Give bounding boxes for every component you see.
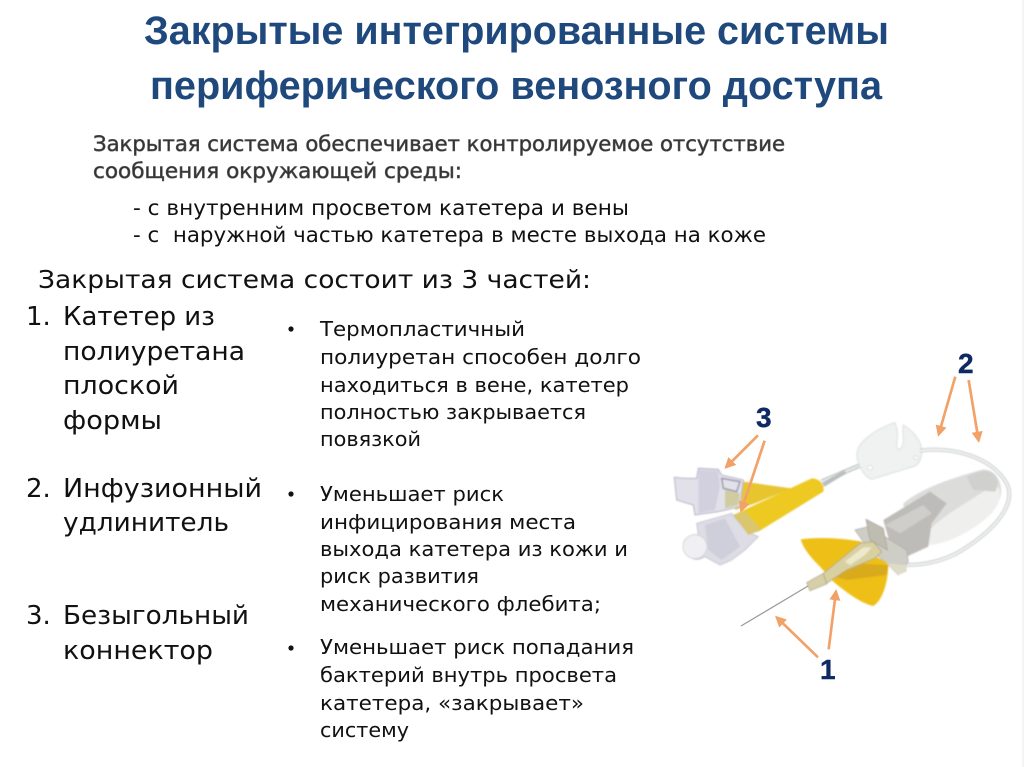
bullet 2: риск развития [320, 564, 479, 588]
dash list: - с наружной частью катетера в месте выхода на коже [133, 223, 766, 247]
bullet 1: повязкой [320, 427, 421, 451]
bullet 2 [288, 482, 628, 616]
label 2: 2 [958, 348, 974, 379]
bullet 3 [288, 635, 634, 742]
part 3: коннектор [63, 636, 213, 666]
title: Закрытые интегрированные системы [144, 9, 889, 53]
part 1: формы [63, 406, 162, 436]
intro paragraph: Закрытая система обеспечивает контролируемое отсутствие [93, 132, 785, 156]
bullet 2: механического флебита; [320, 592, 601, 616]
bullet 2: Уменьшает риск [320, 482, 504, 506]
bullet 3: Уменьшает риск попадания [320, 635, 634, 659]
arrows: callout 2 [939, 377, 979, 441]
part 1: 1. [26, 302, 51, 332]
dash list [133, 196, 766, 247]
section heading: Закрытая система состоит из 3 частей: [38, 265, 591, 294]
intro paragraph [93, 132, 785, 183]
bullet 1: полностью закрывается [320, 400, 586, 424]
part 1: Катетер из [63, 302, 215, 332]
device: extension tube and clamp [822, 423, 922, 482]
intro paragraph: сообщения окружающей среды: [93, 159, 462, 183]
part 1: плоской [63, 371, 179, 401]
bullet 2: выхода катетера из кожи и [320, 537, 628, 561]
bullet 1 [288, 317, 641, 451]
part 1 [26, 302, 245, 436]
part 2: 2. [26, 474, 51, 504]
dash list: - с внутренним просветом катетера и вены [133, 196, 629, 220]
bullet 3: систему [320, 718, 409, 742]
label 1: 1 [820, 654, 836, 685]
title [144, 9, 889, 108]
bullet 3: катетера, «закрывает» [320, 691, 584, 715]
device: catheter body, wings and needle [738, 450, 1009, 639]
arrows: callout 1 [777, 591, 836, 657]
part 2: Инфузионный [63, 474, 262, 504]
bullet 1: полиуретан способен долго [320, 345, 641, 369]
label 3: 3 [756, 402, 772, 433]
bullet 1: находиться в вене, катетер [320, 373, 629, 397]
part 2 [26, 474, 262, 538]
arrows: callout 3 [726, 435, 765, 511]
figure: catheter device with callouts [674, 348, 1009, 685]
title: периферического венозного доступа [150, 64, 883, 108]
bullet list: benefits [288, 317, 641, 742]
device: connectors and yellow hubs [674, 468, 845, 565]
part 3 [26, 601, 249, 666]
device: needle [741, 586, 808, 626]
bullet 1: Термопластичный [319, 317, 525, 341]
part 1: полиуретана [63, 337, 245, 367]
bullet 2: инфицирования места [320, 510, 576, 534]
part 3: 3. [26, 601, 51, 631]
bullet 3: бактерий внутрь просвета [320, 663, 617, 687]
numbered list: parts [26, 302, 262, 666]
part 3: Безыгольный [63, 601, 249, 631]
part 2: удлинитель [63, 508, 229, 538]
